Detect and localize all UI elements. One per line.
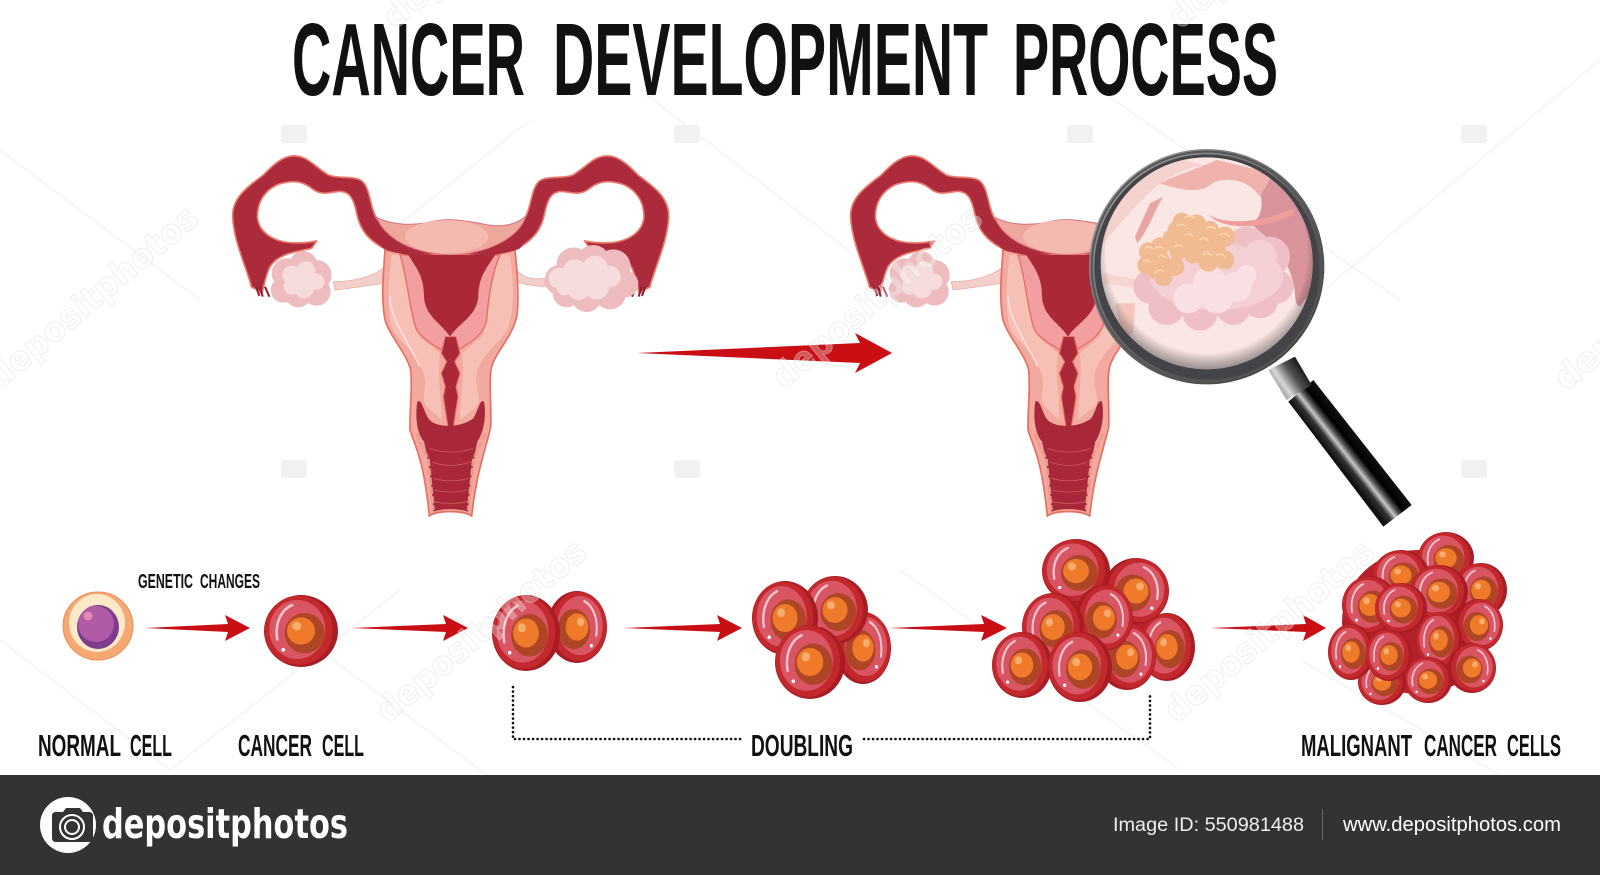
cell cluster: four cells — [752, 576, 891, 699]
title: CANCER — [292, 2, 525, 117]
cell: cancer cell — [264, 595, 338, 667]
title: PROCESS — [1013, 2, 1278, 117]
icon: camera logo — [40, 797, 96, 853]
label: genetic changes: CHANGES — [200, 570, 260, 593]
bracket: doubling — [513, 687, 1150, 739]
arrow: main progression — [637, 333, 892, 373]
label: doubling: DOUBLING — [751, 728, 853, 763]
title: DEVELOPMENT — [553, 2, 988, 117]
arrow: two to four — [623, 615, 742, 641]
arrow: normal to cancer — [145, 615, 250, 641]
logo text: depositphotos — [102, 800, 348, 848]
image id: Image ID: 550981488 — [1113, 814, 1304, 836]
icon: magnifying glass with tumor — [1089, 149, 1412, 527]
illustration: affected uterus — [851, 156, 1287, 516]
label: malignant cancer cells: CANCER — [1424, 728, 1497, 763]
label: genetic changes: GENETIC — [138, 570, 193, 593]
cell cluster: malignant cancer cells — [1328, 532, 1507, 705]
cell cluster: two cells — [492, 591, 607, 671]
watermark: depositphotos — [368, 532, 594, 731]
website: www.depositphotos.com — [1342, 814, 1561, 836]
arrow: eight to malignant — [1210, 615, 1326, 641]
label: malignant cancer cells: MALIGNANT — [1301, 728, 1412, 763]
label: cancer cell: CELL — [322, 728, 364, 763]
watermark cameras — [281, 125, 1487, 478]
cell cluster: eight cells — [992, 539, 1195, 702]
arrow: cancer to doubling — [351, 615, 468, 641]
label: cancer cell: CANCER — [238, 728, 312, 763]
label: normal cell: NORMAL — [38, 728, 121, 763]
watermark: depositphotos — [764, 198, 990, 397]
cell: normal cell — [63, 592, 133, 660]
watermark: depositphotos — [1156, 532, 1382, 731]
label: normal cell: CELL — [130, 728, 172, 763]
title — [292, 2, 1278, 117]
arrow: four to eight — [888, 615, 1007, 641]
footer bar — [0, 775, 1600, 875]
illustration: healthy uterus — [233, 156, 669, 516]
